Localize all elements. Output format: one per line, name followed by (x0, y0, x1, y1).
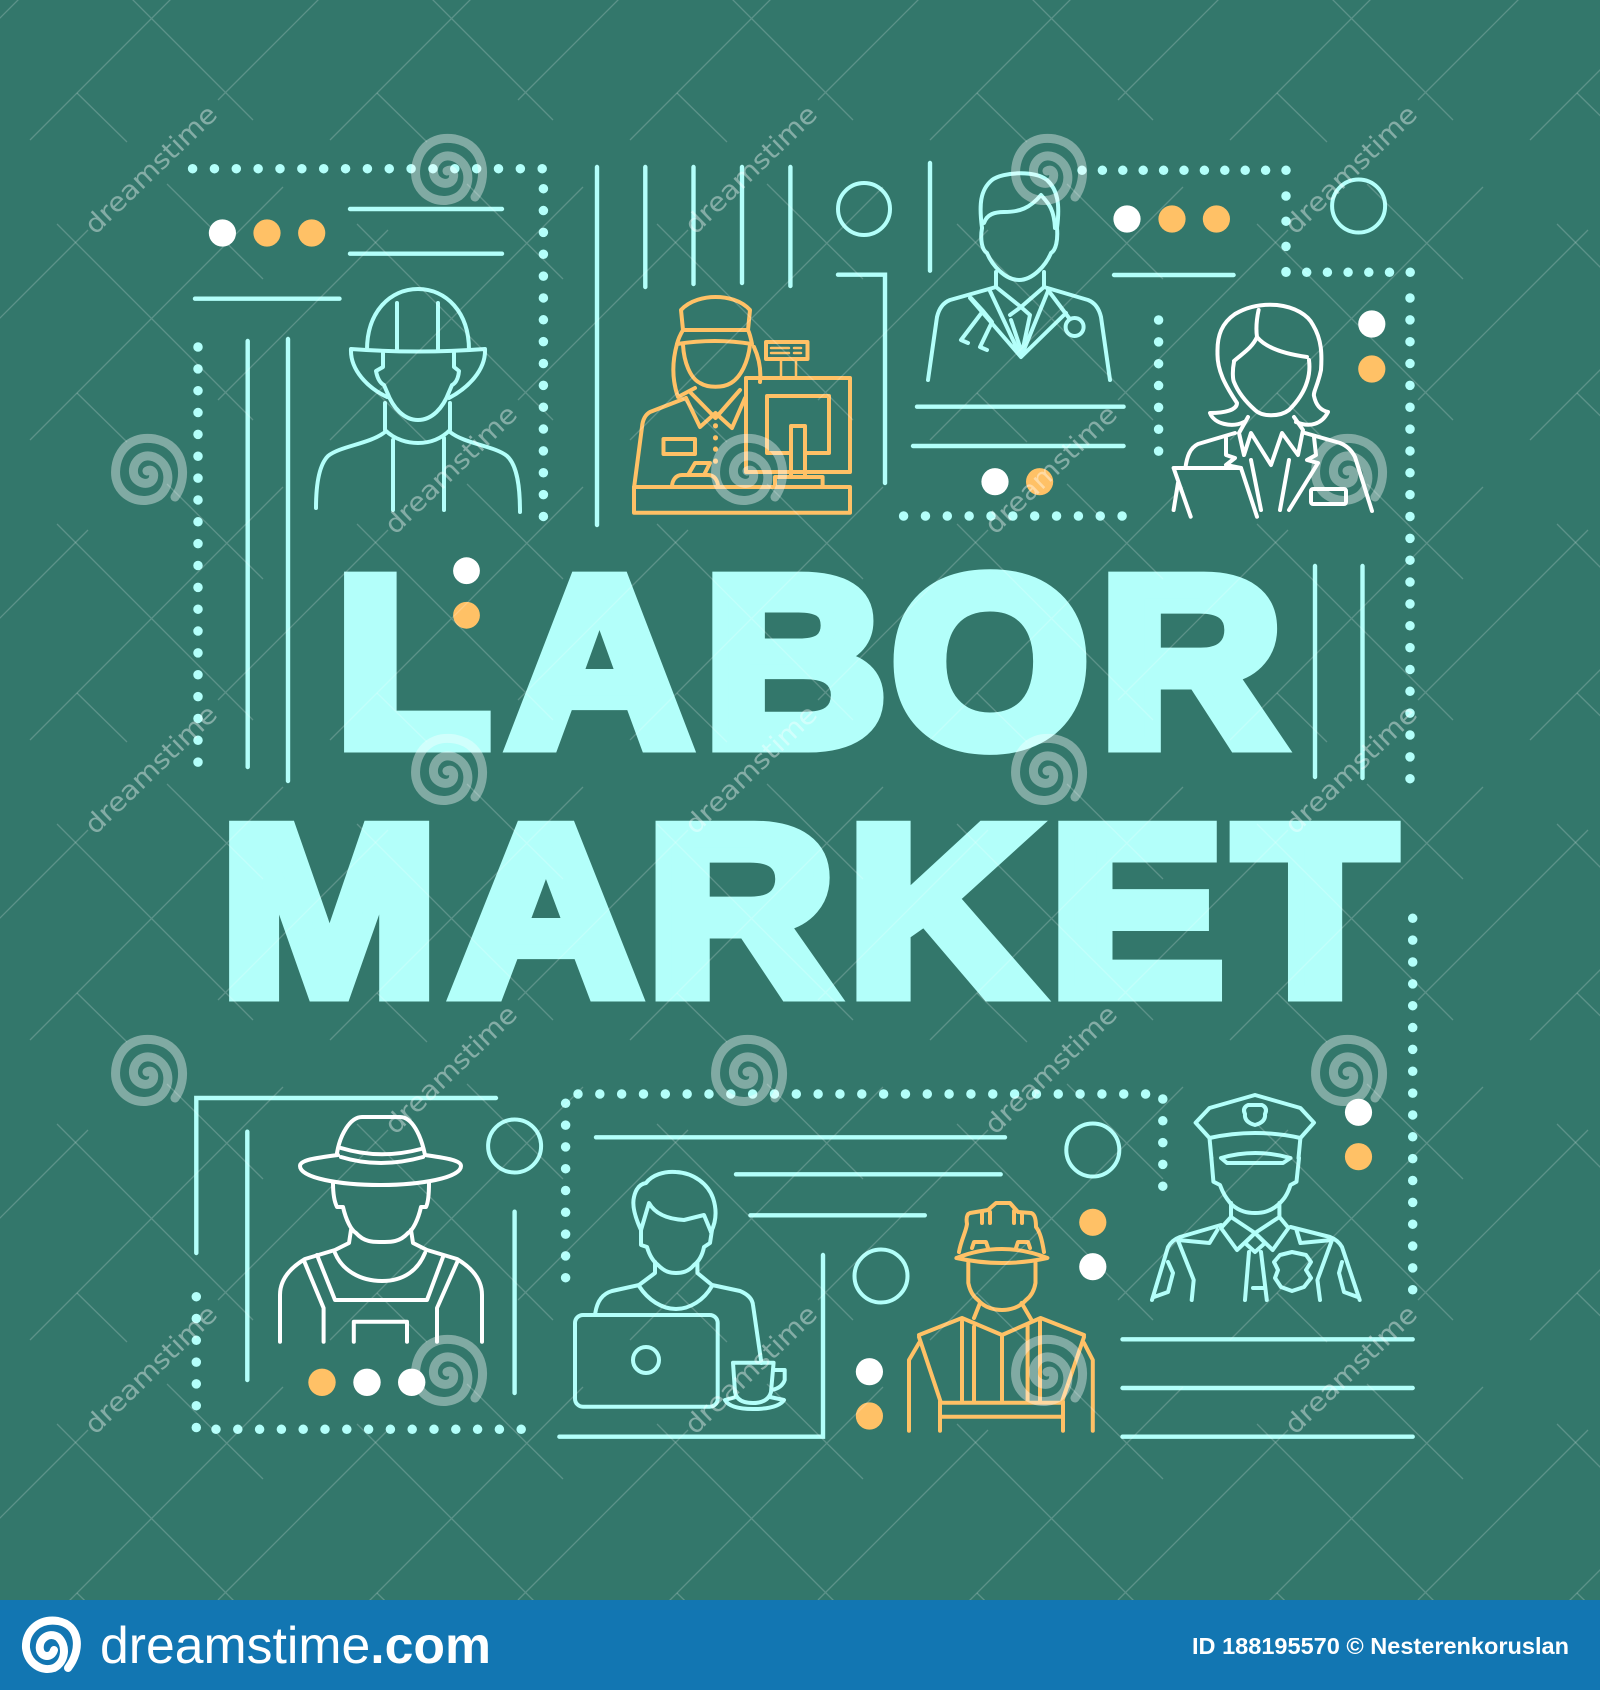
text placeholder lines (913, 275, 1234, 446)
icon: dreamstime logo spiral (26, 1621, 77, 1669)
text placeholder lines (559, 1137, 1005, 1437)
icon: farmer (280, 1117, 482, 1342)
title: LABOR MARKET (220, 527, 1395, 1046)
ring (838, 183, 890, 235)
dotted frame (196, 1297, 524, 1429)
text placeholder lines (195, 209, 502, 781)
text placeholder lines (1122, 1339, 1413, 1437)
watermark: dreamstime text (79, 99, 1424, 1441)
icon: firefighter (316, 289, 520, 512)
panel: bottom right police frame (1122, 1095, 1413, 1437)
watermark: dreamstime text: dreamstime (679, 1299, 824, 1441)
footer banner (0, 1600, 1600, 1690)
panel: bottom left farmer frame (196, 1098, 541, 1429)
logo wordmark: dreamstime.com (100, 1617, 491, 1675)
dotted frame (1082, 166, 1288, 175)
icon: police officer (1152, 1095, 1360, 1300)
frame lines (196, 1098, 515, 1393)
watermark: dreamstime text: dreamstime (679, 99, 824, 241)
ring (1332, 180, 1385, 232)
status dots (308, 1369, 425, 1396)
icon: programmer with laptop and coffee (575, 1172, 785, 1409)
vertical lines (1315, 566, 1362, 778)
dotted column (1408, 918, 1417, 1293)
watermark: dreamstime text: dreamstime (1279, 99, 1424, 241)
title: LABOR MARKET: MARKET (220, 777, 1395, 1046)
panel: bottom centre programmer frame (559, 1094, 1163, 1437)
watermark: dreamstime text: dreamstime (379, 999, 524, 1141)
watermark: dreamstime text: dreamstime (379, 399, 524, 541)
rings (854, 1124, 1119, 1302)
watermark: dreamstime text: dreamstime (79, 99, 224, 241)
status dots (1345, 1099, 1372, 1170)
status dots (856, 1209, 1106, 1430)
icon: construction worker (909, 1203, 1093, 1431)
watermark: dreamstime text: dreamstime (1279, 699, 1424, 841)
watermark: dreamstime text: dreamstime (1279, 1299, 1424, 1441)
panel: top left firefighter frame (193, 169, 544, 781)
orange and white dots (453, 557, 480, 629)
watermark: dreamstime text: dreamstime (79, 1299, 224, 1441)
panel: top centre cashier frame (597, 163, 930, 525)
icon: cashier with register (634, 297, 850, 513)
panel: top right doctors frame (904, 170, 1412, 782)
watermark: dreamstime text: dreamstime (79, 699, 224, 841)
vertical lines (597, 163, 930, 525)
image id and credit: ID 188195570 © Nesterenkoruslan (1192, 1633, 1569, 1659)
watermark: dreamstime text: dreamstime (979, 999, 1124, 1141)
icon: female doctor (1174, 305, 1372, 517)
three status dots (209, 219, 325, 247)
title: LABOR MARKET: LABOR (335, 527, 1283, 797)
ring (488, 1120, 541, 1172)
watermark: spirals (116, 138, 1383, 1401)
dotted frame (193, 169, 544, 767)
icon: male doctor (928, 173, 1110, 380)
dotted frame (578, 1089, 1148, 1099)
status dots (981, 205, 1385, 495)
panel: centre decorations beside title (453, 557, 1413, 1293)
watermark: dreamstime text: dreamstime (979, 399, 1124, 541)
watermark: dreamstime text: dreamstime (679, 699, 824, 841)
